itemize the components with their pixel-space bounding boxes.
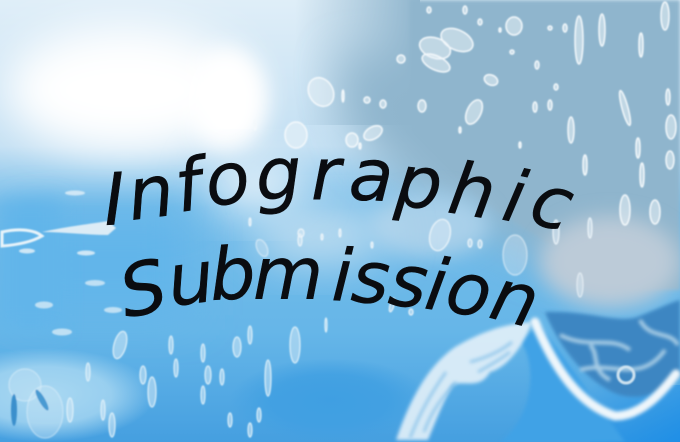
title: Submission: n <box>483 252 547 345</box>
water swoosh: left ripple <box>2 190 122 336</box>
title: Infographic: I <box>101 157 127 242</box>
title: Infographic: n <box>123 148 178 237</box>
title: Infographic: i <box>496 153 534 240</box>
title: Submission: s <box>349 234 393 321</box>
bubbles: centre droplets <box>249 217 592 315</box>
title: Infographic: c <box>523 157 582 248</box>
bubbles: lower left droplets <box>9 318 327 438</box>
water stream: white rising swath <box>396 322 532 440</box>
water wave: deep blue splash <box>500 300 680 442</box>
title: Infographic <box>101 131 582 248</box>
title: Submission: u <box>163 234 218 323</box>
title: Infographic: r <box>311 132 345 216</box>
title: Infographic: h <box>443 146 502 236</box>
title: Submission: S <box>112 243 174 335</box>
title: Infographic: a <box>347 132 396 218</box>
title: Submission: o <box>440 244 499 335</box>
title: Infographic: p <box>391 138 446 227</box>
title: Submission: m <box>253 232 323 316</box>
background: pale grey cloud above the wave <box>540 216 680 308</box>
title: Submission: b <box>207 231 258 317</box>
background: white glow upper left <box>5 25 305 213</box>
title: Submission: i <box>420 242 453 328</box>
title: Infographic: g <box>253 131 304 217</box>
title: Submission: s <box>385 237 432 325</box>
background: blue band left <box>0 200 430 442</box>
title: Infographic: f <box>170 141 216 229</box>
title: Submission: i <box>330 233 354 318</box>
title: Submission <box>112 231 547 345</box>
title: Infographic: o <box>201 135 254 223</box>
background: grey-blue haze upper right <box>250 0 680 290</box>
bubbles: upper right droplets <box>254 2 676 225</box>
